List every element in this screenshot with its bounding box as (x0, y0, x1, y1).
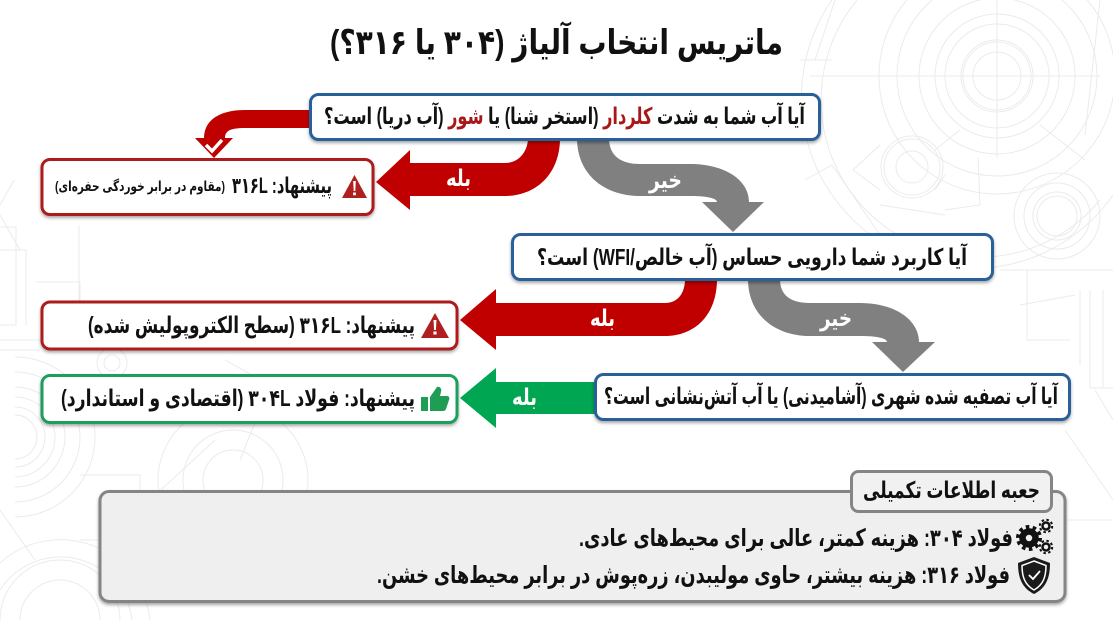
arrow: yes red to 316L electropolished (460, 279, 717, 350)
question box 1: آیا آب شما به شدت کلردار (استخر شنا) یا شور (آب دریا) است؟ (324, 101, 806, 130)
title: ماتریس انتخاب آلیاژ (۳۰۴ یا ۳۱۶؟) (330, 21, 783, 63)
question box 3 (596, 374, 1070, 420)
panel tab heading: جعبه اطلاعات تکمیلی (863, 477, 1040, 503)
recommendation box: 304L (42, 376, 457, 422)
icon: gears (1018, 520, 1052, 553)
question box 2 (512, 234, 992, 280)
question box 1 (310, 94, 820, 140)
arrow: yes small red to first recommendation (195, 110, 312, 158)
arrow: yes green to 304L: بله (512, 384, 537, 410)
arrow: yes red to 316L electropolished: بله (590, 305, 615, 331)
text: steel 304: فولاد ۳۰۴: هزینه کمتر، عالی برای محیط‌های عادی. (579, 525, 1013, 552)
recommendation box: 316L electropolished: پیشنهاد: ۳۱۶L (سطح الکتروپولیش شده) (88, 312, 415, 339)
arrow: yes green to 304L (460, 368, 597, 428)
arrow: no gray to third question: خیر (819, 305, 852, 332)
panel: additional information (100, 472, 1065, 602)
arrow: yes red to 316L pitting: بله (446, 165, 471, 191)
recommendation box: 316L pitting resistant: پیشنهاد: ۳۱۶L (232, 173, 332, 199)
arrow: yes red to 316L pitting (376, 138, 560, 210)
recommendation box: 316L pitting resistant (42, 160, 373, 214)
recommendation box: 316L electropolished (42, 302, 457, 349)
icon: thumbs up (421, 387, 449, 411)
icon: shield (1018, 557, 1050, 594)
recommendation box: 304L: پیشنهاد: فولاد ۳۰۴L (اقتصادی و استاندارد) (61, 385, 415, 412)
text: steel 316: فولاد ۳۱۶: هزینه بیشتر، حاوی مولیبدن، زره‌پوش در برابر محیط‌های خشن. (377, 562, 1010, 589)
icon: warning triangle (342, 175, 367, 198)
question box 2: آیا کاربرد شما دارویی حساس (آب خالص/WFI) است؟ (537, 242, 968, 271)
arrow: no gray to second question (577, 138, 764, 232)
recommendation box: 316L pitting resistant: (مقاوم در برابر خوردگی حفره‌ای) (55, 178, 225, 195)
panel tab heading (852, 472, 1052, 512)
arrow: no gray to second question: خیر (648, 167, 682, 194)
icon: warning triangle (421, 313, 449, 338)
arrow: no gray to third question (748, 279, 935, 372)
